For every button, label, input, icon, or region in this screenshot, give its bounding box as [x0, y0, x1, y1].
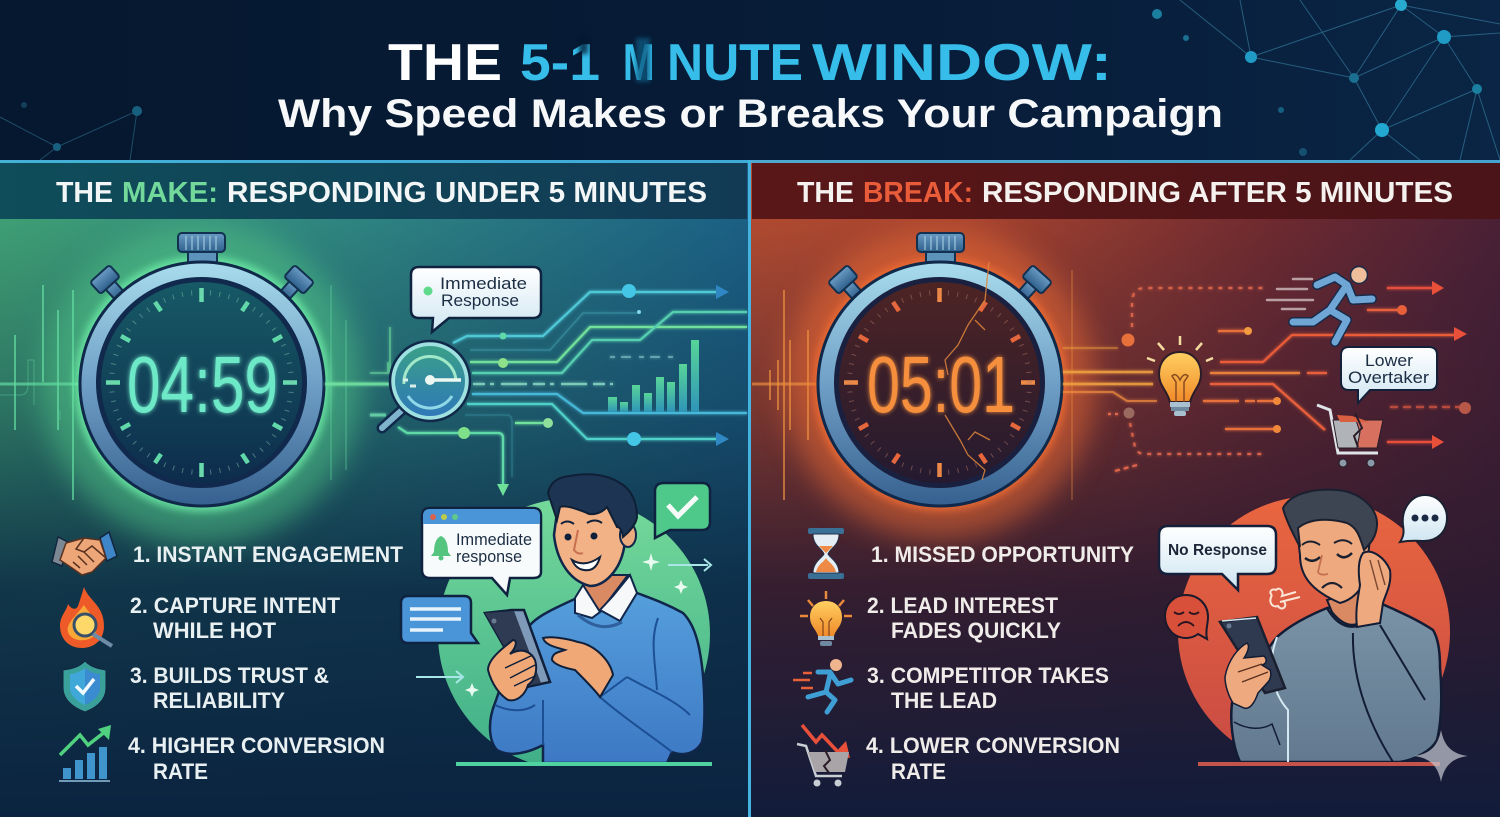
ground line	[1198, 762, 1440, 766]
crown	[178, 233, 225, 266]
face details	[1302, 540, 1352, 588]
no response callout: No Response	[1168, 542, 1267, 559]
head	[554, 500, 630, 586]
item 4: RATE	[153, 759, 208, 784]
heading: the break: RESPONDING AFTER 5 MINUTES	[982, 177, 1453, 209]
icon: running competitor	[1267, 266, 1372, 342]
callout: immediate response: Immediate	[440, 274, 527, 293]
icon: fading bulb	[800, 591, 852, 646]
callout: immediate response	[411, 267, 541, 332]
icon: hourglass	[808, 528, 844, 579]
dial ticks	[106, 288, 297, 477]
heading: the break: THE	[797, 177, 854, 209]
item 3: 3. BUILDS TRUST &	[130, 663, 329, 688]
sad emoji bubble	[1165, 595, 1208, 639]
sweater	[490, 593, 704, 763]
circuit arrows and nodes	[1122, 281, 1471, 449]
item 4: 4. HIGHER CONVERSION	[128, 733, 385, 758]
ground line	[456, 762, 712, 766]
sparkles and arrows	[416, 553, 711, 697]
item 3	[867, 663, 1109, 713]
panel background	[0, 160, 749, 817]
neck shade	[1327, 590, 1362, 625]
circuit arrows and nodes	[458, 284, 729, 496]
illustration: sad person with phone	[1159, 490, 1450, 768]
notification card	[422, 508, 541, 595]
stopwatch: over five minutes	[813, 233, 1067, 511]
corner sparkle mark	[1414, 730, 1468, 782]
item 3: THE LEAD	[891, 688, 997, 713]
item 2: 2. CAPTURE INTENT	[130, 593, 340, 618]
icon: light bulb with rays	[1147, 336, 1213, 416]
holding hand	[1225, 643, 1271, 708]
network pattern: top left	[0, 102, 142, 160]
magnifier gauge	[382, 341, 470, 428]
blue message bubble	[401, 596, 478, 643]
head	[1297, 505, 1370, 603]
thinking bubble	[1400, 495, 1447, 542]
circuit lines: lost momentum	[1063, 288, 1460, 471]
item 2: 2. LEAD INTEREST	[867, 593, 1058, 618]
panel: the break	[750, 160, 1500, 817]
panel background	[750, 160, 1500, 817]
side knobs	[828, 265, 1052, 305]
waveform left of stopwatch	[0, 285, 346, 500]
title: WINDOW:	[812, 34, 1112, 92]
bar chart	[608, 340, 699, 412]
callout: immediate response: Response	[441, 291, 519, 310]
crown	[917, 233, 964, 266]
face details	[561, 520, 602, 570]
network pattern: top right	[1152, 0, 1500, 160]
item 2: WHILE HOT	[153, 618, 276, 643]
title: MI	[623, 34, 665, 92]
timer digits: 05:01	[867, 340, 1015, 429]
dial ticks	[844, 288, 1035, 477]
check bubble	[655, 483, 710, 538]
header band	[752, 163, 1500, 219]
icon: falling cart	[797, 725, 850, 786]
icon: shield with check	[63, 661, 106, 712]
header background	[0, 0, 1500, 161]
ear	[620, 523, 636, 547]
title: NUTE	[667, 34, 803, 92]
holding hand	[488, 640, 536, 700]
hair	[1283, 490, 1377, 550]
list: benefits	[128, 542, 403, 784]
green circle backdrop	[438, 498, 710, 770]
timer digits: 04:59	[127, 340, 278, 429]
callout: lower overtaker: Overtaker	[1348, 368, 1429, 387]
header band	[0, 163, 747, 219]
callout: lower overtaker: Lower	[1365, 351, 1413, 370]
callout: lower overtaker	[1341, 347, 1437, 403]
icon: growth chart	[59, 725, 111, 781]
no response callout	[1159, 526, 1276, 590]
sweater	[1231, 603, 1441, 762]
heading: the make: THE	[56, 177, 113, 209]
item 3: 3. COMPETITOR TAKES	[867, 663, 1109, 688]
shirt collar	[575, 575, 637, 621]
icon: broken cart	[1317, 405, 1383, 467]
icon: handshake	[52, 532, 117, 575]
item 2: FADES QUICKLY	[891, 618, 1061, 643]
subtitle: Why Speed Makes or Breaks Your Campaign	[278, 92, 1223, 136]
item 4	[128, 733, 385, 784]
cracks	[945, 262, 990, 480]
icon: flame with magnifier	[60, 587, 112, 648]
orange circle backdrop	[1178, 498, 1450, 741]
neck	[583, 575, 628, 612]
item 4	[866, 733, 1120, 784]
illustration: happy person with phone	[401, 474, 712, 770]
item 3	[130, 663, 329, 713]
title	[388, 34, 1112, 92]
item 1: 1. INSTANT ENGAGEMENT	[133, 542, 403, 567]
item 4: 4. LOWER CONVERSION	[866, 733, 1120, 758]
item 1: 1. MISSED OPPORTUNITY	[871, 542, 1134, 567]
panel: the make	[0, 160, 749, 817]
notification card: Immediate	[456, 531, 532, 549]
pointing hand	[543, 637, 613, 697]
item 2	[130, 593, 340, 643]
icon: runner small	[793, 659, 851, 712]
heading: the make: RESPONDING UNDER 5 MINUTES	[227, 177, 707, 209]
title: THE	[388, 34, 502, 92]
item 4: RATE	[891, 759, 946, 784]
phone	[485, 610, 550, 687]
notification card: response	[456, 548, 522, 566]
phone	[1220, 617, 1285, 693]
hair	[548, 474, 637, 537]
forearm shading	[495, 618, 690, 752]
list: risks	[866, 542, 1134, 784]
heading: the make: MAKE:	[122, 177, 218, 209]
hand on cheek	[1356, 552, 1390, 627]
stopwatch: under five minutes	[74, 233, 330, 512]
waveform left of stopwatch	[752, 270, 1072, 500]
title: 5-1	[520, 34, 600, 92]
item 2	[867, 593, 1061, 643]
puff of sigh	[1270, 589, 1300, 609]
item 3: RELIABILITY	[153, 688, 285, 713]
heading: the break: BREAK:	[863, 177, 973, 209]
circuit lines: fast response	[325, 292, 747, 488]
side knobs	[90, 265, 314, 305]
